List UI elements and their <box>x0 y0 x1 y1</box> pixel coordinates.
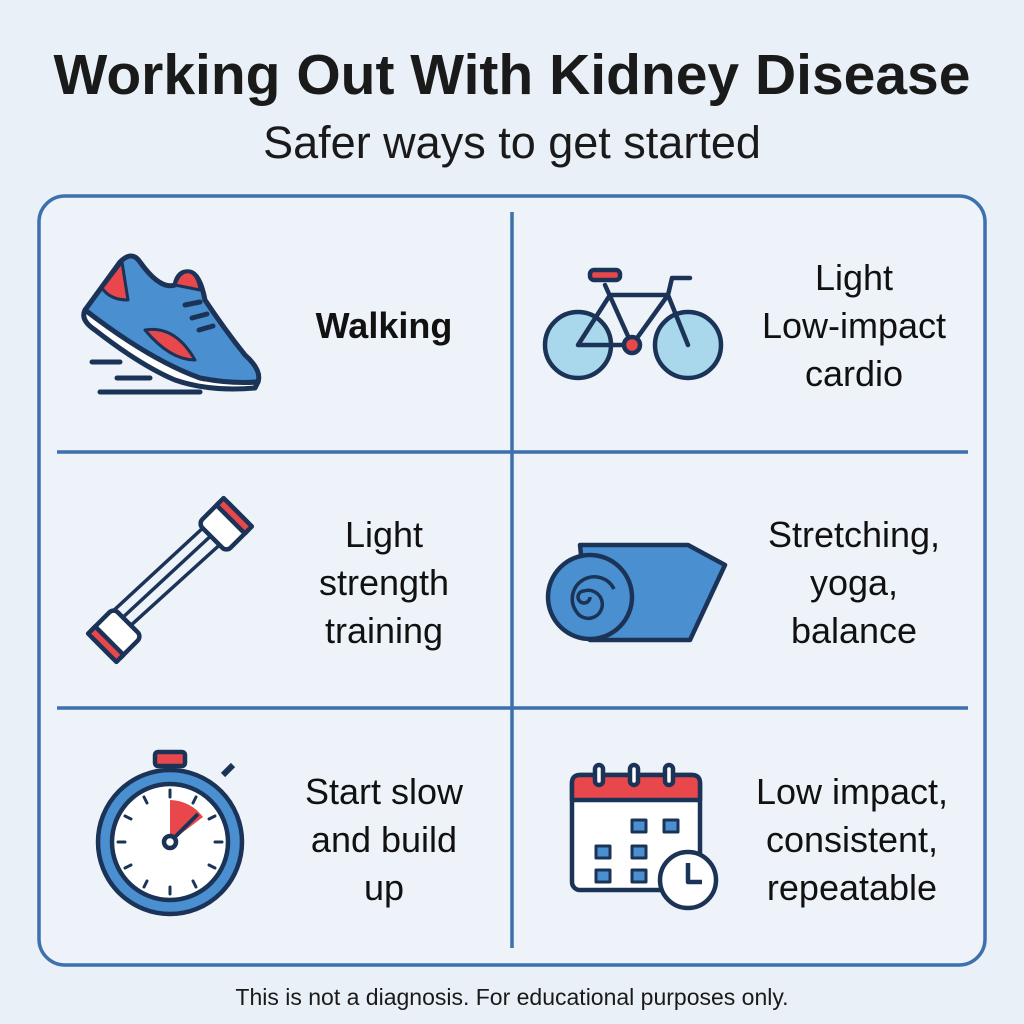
label: walking: Walking <box>316 305 452 346</box>
label: strength: training <box>325 610 443 651</box>
label: light cardio: Low-impact <box>762 305 946 346</box>
subtitle: Safer ways to get started <box>263 117 761 168</box>
label: light cardio: cardio <box>805 353 903 394</box>
label: strength: strength <box>319 562 449 603</box>
icon: calendar <box>572 765 716 908</box>
label: stretching: Stretching, <box>768 514 940 555</box>
label: strength: Light <box>345 514 423 555</box>
panel: activity grid <box>39 196 985 965</box>
title: Working Out With Kidney Disease <box>54 43 970 107</box>
icon: bicycle <box>545 270 721 378</box>
icon: stopwatch <box>98 752 242 914</box>
label: light cardio: Light <box>815 257 893 298</box>
label: low impact: consistent, <box>766 819 938 860</box>
label: start slow: Start slow <box>305 771 464 812</box>
label: low impact: repeatable <box>767 867 937 908</box>
label: start slow: up <box>364 867 404 908</box>
icon: shoe <box>84 256 259 392</box>
icon: yoga mat <box>548 545 725 640</box>
label: start slow: and build <box>311 819 457 860</box>
label: stretching: yoga, <box>810 562 898 603</box>
label: low impact: Low impact, <box>756 771 948 812</box>
label: stretching: balance <box>791 610 917 651</box>
footer: This is not a diagnosis. For educational purposes only. <box>235 984 789 1010</box>
icon: resistance band <box>88 498 252 662</box>
